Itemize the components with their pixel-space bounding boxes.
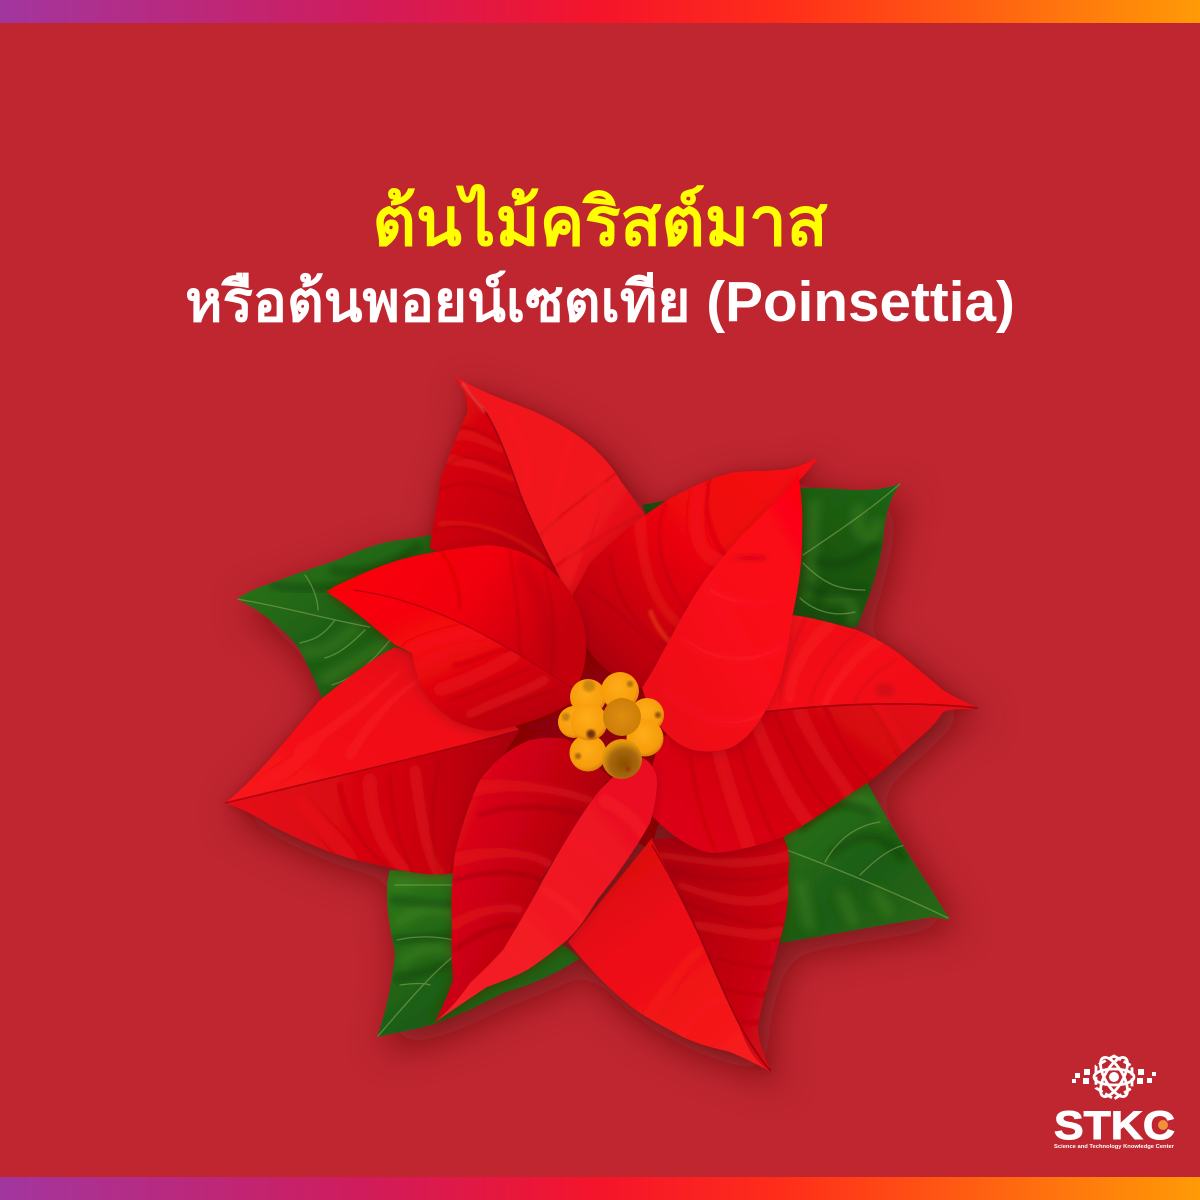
- red bract: top: [430, 376, 645, 640]
- green leaf: top right: [642, 483, 901, 640]
- logo wordmark: STKC: [1054, 1104, 1175, 1148]
- red bract: upper left: [325, 545, 586, 731]
- red bract: right: [649, 615, 978, 853]
- bottom gradient bar: [0, 1177, 1200, 1200]
- subtitle: หรือต้นพอยน์เซตเทีย (Poinsettia): [185, 271, 1015, 334]
- orange berries: [558, 672, 664, 779]
- red bract: upper right front: [642, 473, 802, 752]
- red bract: left: [225, 647, 520, 875]
- red bract: bottom left: [435, 738, 657, 1022]
- illustration: poinsettia flower: [222, 376, 1174, 1149]
- top gradient bar: [0, 0, 1200, 23]
- red bract: upper right back: [570, 457, 818, 690]
- green leaf: left: [237, 535, 470, 698]
- red bract: bottom: [568, 836, 790, 1072]
- logo wordmark: Science and Technology Knowledge Center: [1054, 1144, 1175, 1150]
- green leaf: bottom right: [770, 782, 950, 943]
- logo icon: atom: [1072, 1053, 1156, 1101]
- title: ต้นไม้คริสต์มาส: [372, 185, 828, 260]
- dark flower centre: [500, 640, 680, 850]
- green leaf: bottom left: [377, 870, 580, 1037]
